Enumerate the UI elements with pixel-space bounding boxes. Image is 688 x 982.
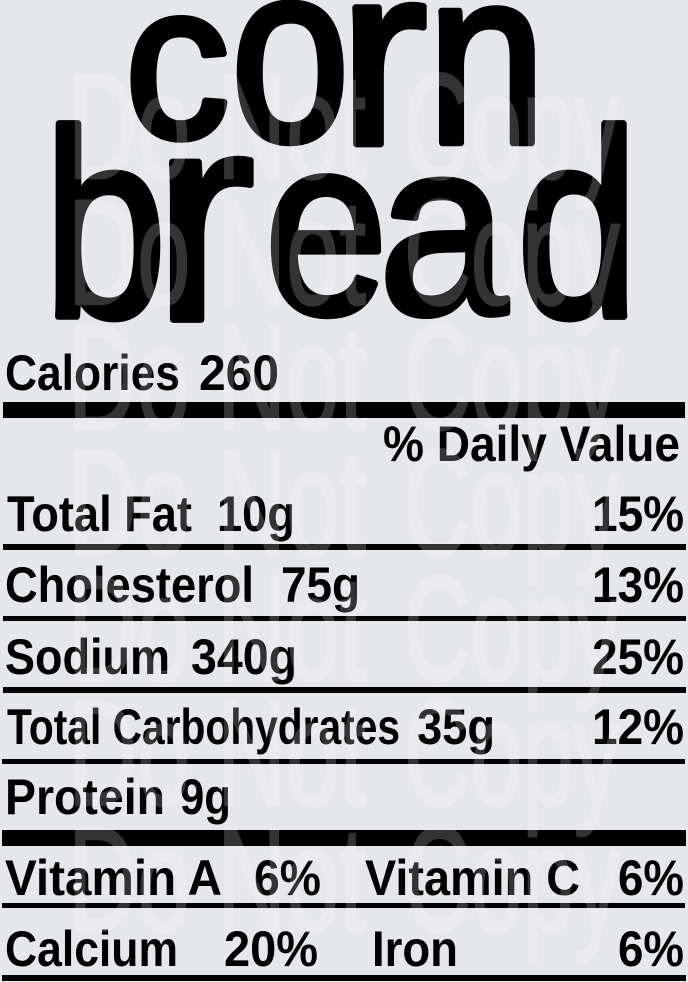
title word: corn — [125, 0, 545, 199]
row: vitamins — [5, 850, 684, 906]
divider — [2, 975, 686, 981]
divider — [2, 903, 685, 908]
row: sodium: 340g — [191, 629, 297, 685]
thick divider — [2, 830, 686, 846]
row: minerals — [5, 921, 684, 977]
row: minerals: Iron — [372, 921, 458, 977]
row: total carbohydrates: Total Carbohydrates — [7, 699, 400, 755]
title word: bread: e — [265, 85, 388, 367]
row: total carbohydrates: 35g — [417, 699, 495, 755]
row: sodium: Sodium — [5, 629, 170, 685]
divider — [3, 544, 686, 550]
row: minerals: 20% — [224, 921, 318, 977]
row: minerals: Calcium — [5, 921, 178, 977]
title word: bread: d — [517, 77, 638, 373]
row: total fat: Total Fat — [7, 486, 192, 542]
row: cholesterol — [5, 557, 684, 613]
row: total fat — [7, 486, 684, 542]
watermark: Do Not Copy: Do Not — [68, 293, 366, 461]
title word: bread: r — [152, 51, 255, 383]
title word: bread: a — [379, 89, 507, 366]
calories row: 260 — [199, 345, 279, 401]
title word: bread — [44, 51, 638, 383]
title: corn bread — [44, 0, 638, 383]
divider — [3, 687, 686, 693]
thick divider — [3, 402, 685, 418]
watermark: Do Not Copy: Do Not — [68, 42, 366, 210]
row: vitamins: 6% — [254, 850, 321, 906]
divider — [2, 759, 685, 764]
watermark: Do Not Copy — [68, 42, 620, 963]
watermark: Do Not Copy: Do Not — [68, 669, 366, 837]
watermark: Do Not Copy: Do Not — [68, 168, 366, 336]
calories row: Calories — [5, 345, 180, 401]
row: cholesterol: Cholesterol — [5, 557, 254, 613]
row: protein: 9g — [180, 769, 231, 825]
watermark: Do Not Copy: Do Not — [68, 544, 366, 712]
title word: bread: b — [44, 77, 166, 373]
row: cholesterol: 75g — [281, 557, 360, 613]
row: total fat: 10g — [217, 486, 295, 542]
row: protein: Protein — [5, 769, 165, 825]
watermark: Do Not Copy: Do Not — [68, 795, 366, 963]
row: vitamins: Vitamin C — [365, 850, 580, 906]
row: sodium — [5, 629, 684, 685]
divider — [3, 616, 686, 621]
row: vitamins: Vitamin A — [5, 850, 222, 906]
watermark: Do Not Copy: Do Not — [68, 418, 366, 586]
